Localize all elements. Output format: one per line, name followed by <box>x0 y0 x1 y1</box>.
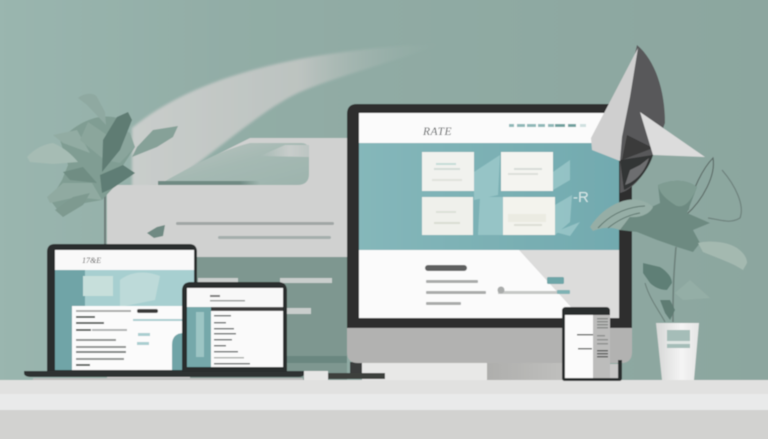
phone frame <box>562 307 622 381</box>
tray highlight <box>260 145 309 157</box>
printer paper tray <box>158 143 309 185</box>
plant feathered leaf <box>590 200 653 231</box>
hero letter mark: -R <box>573 189 589 206</box>
plant curved streaks <box>598 206 645 228</box>
plant pale leaf <box>698 242 747 270</box>
laptop text lines <box>76 309 158 366</box>
band paper strips <box>198 278 332 314</box>
mid leaf <box>63 167 97 183</box>
plant upper foliage <box>658 181 697 206</box>
tablet header <box>187 288 283 307</box>
printer body <box>107 138 347 380</box>
plant bottom leaf <box>660 300 675 320</box>
laptop hero <box>55 270 194 307</box>
foliage backing mass <box>50 117 135 217</box>
crane white wing <box>640 112 705 157</box>
translucent hero shapes <box>474 155 580 236</box>
content heading bar <box>425 265 467 271</box>
laptop frame <box>47 244 197 372</box>
tablet logo lines <box>210 295 245 302</box>
card 3 <box>422 197 473 235</box>
plant pot <box>656 323 699 380</box>
laptop base <box>24 371 304 377</box>
desktop monitor <box>304 104 632 380</box>
dark upright leaf <box>102 112 132 172</box>
monitor stand <box>304 362 567 380</box>
laptop accent strips <box>133 319 183 345</box>
upper left leaf <box>53 130 90 153</box>
crane light wing <box>591 48 638 161</box>
tablet dark bar <box>211 307 283 311</box>
printer lower band <box>190 257 347 380</box>
laptop hero card <box>83 276 113 296</box>
right plant <box>590 158 747 322</box>
printer text lines <box>176 222 334 239</box>
crane dark body <box>620 45 665 193</box>
card 4 <box>503 197 555 235</box>
central leaf <box>80 122 110 158</box>
phone gray column <box>593 315 610 378</box>
plant lower right leaf <box>675 280 710 300</box>
light right leaf <box>105 125 135 163</box>
printer <box>107 138 347 380</box>
plant main foliage <box>620 181 710 252</box>
lower content panel <box>359 250 619 318</box>
tablet <box>182 282 287 372</box>
lower band dark strip <box>287 356 347 363</box>
left plant <box>27 94 178 247</box>
content text lines <box>426 280 486 305</box>
laptop content panel <box>72 306 194 370</box>
bottom leaf <box>55 193 90 217</box>
crane inner facet <box>625 158 649 185</box>
tray shadow <box>158 181 260 185</box>
shelf highlight <box>33 378 303 380</box>
navigation bar <box>509 124 586 127</box>
tablet text lines <box>214 315 250 364</box>
plant stems <box>645 158 741 322</box>
tablet frame <box>182 282 287 372</box>
laptop <box>24 244 304 380</box>
shelf <box>0 380 768 439</box>
swoosh shape behind printer <box>132 44 440 190</box>
tablet content <box>211 311 283 367</box>
monitor screen <box>359 113 619 318</box>
plant stem <box>104 195 106 247</box>
pointed right leaf <box>132 126 178 157</box>
crane mid shadow <box>622 135 653 160</box>
plant lower left leaf <box>643 263 672 290</box>
monitor frame <box>347 104 632 328</box>
logo text: RATE <box>422 126 452 138</box>
paper crane sculpture <box>591 45 705 193</box>
teal hero <box>359 143 619 250</box>
smartphone <box>562 307 622 381</box>
lower left leaf <box>47 183 102 203</box>
crane lower facet <box>620 155 653 190</box>
card 2 <box>501 152 553 191</box>
laptop hero shape <box>120 273 160 307</box>
lower right dark leaf <box>100 165 135 193</box>
left wide leaf <box>27 143 78 164</box>
monitor chin <box>347 328 632 363</box>
pot label <box>667 330 690 348</box>
slider control <box>498 277 570 294</box>
tablet teal sidebar <box>187 307 211 367</box>
diagonal shaded panel <box>519 250 619 318</box>
laptop logo text: 17&E <box>82 256 101 265</box>
phone text lines <box>577 318 608 358</box>
top leaf <box>78 94 106 125</box>
laptop screen header <box>55 250 194 270</box>
card 1 <box>422 152 474 191</box>
phone screen <box>565 315 593 378</box>
printer small leaf mark <box>147 225 165 238</box>
laptop teal corner <box>172 333 184 370</box>
